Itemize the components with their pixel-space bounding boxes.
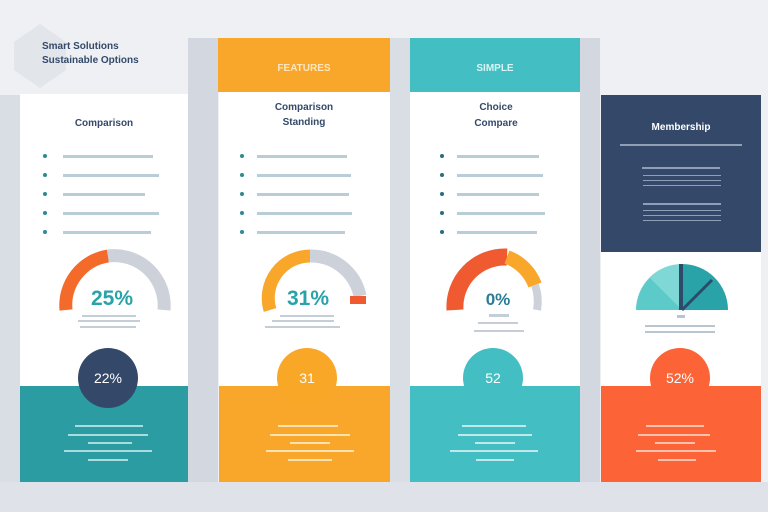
gauge 25%	[66, 256, 164, 310]
circle badge	[650, 348, 710, 408]
panel: column 2: FEATURES	[277, 63, 331, 74]
circle badge: 52%	[666, 370, 694, 386]
circle badge: 31	[299, 370, 315, 386]
gauge: 0%	[486, 290, 510, 309]
panel: column 4: Membership	[652, 122, 710, 133]
title: Sustainable Options	[42, 55, 139, 66]
panel: column 2: Standing	[283, 117, 325, 128]
gauge 25%: 25%	[91, 287, 133, 310]
circle badge	[463, 348, 523, 408]
gauge 31%: 31%	[287, 287, 329, 310]
gauge	[455, 257, 538, 310]
circle badge: 52	[485, 370, 501, 386]
panel: column 3	[410, 38, 580, 482]
panel: column 3: Choice	[479, 102, 513, 113]
title	[42, 41, 139, 66]
panel: column 1	[20, 94, 188, 482]
title: Smart Solutions	[42, 41, 119, 52]
panel: column 2: Comparison	[275, 102, 333, 113]
panel: column 3: SIMPLE	[476, 63, 514, 74]
panel: column 3: Compare	[474, 118, 518, 129]
circle badge: 22%	[94, 370, 122, 386]
panel: column 1: Comparison	[75, 118, 133, 129]
panel: column 4	[601, 95, 761, 482]
circle badge	[277, 348, 337, 408]
pie chart	[636, 264, 728, 310]
panel: column 2	[218, 38, 390, 482]
circle badge	[78, 348, 138, 408]
gauge 31%	[268, 256, 366, 310]
